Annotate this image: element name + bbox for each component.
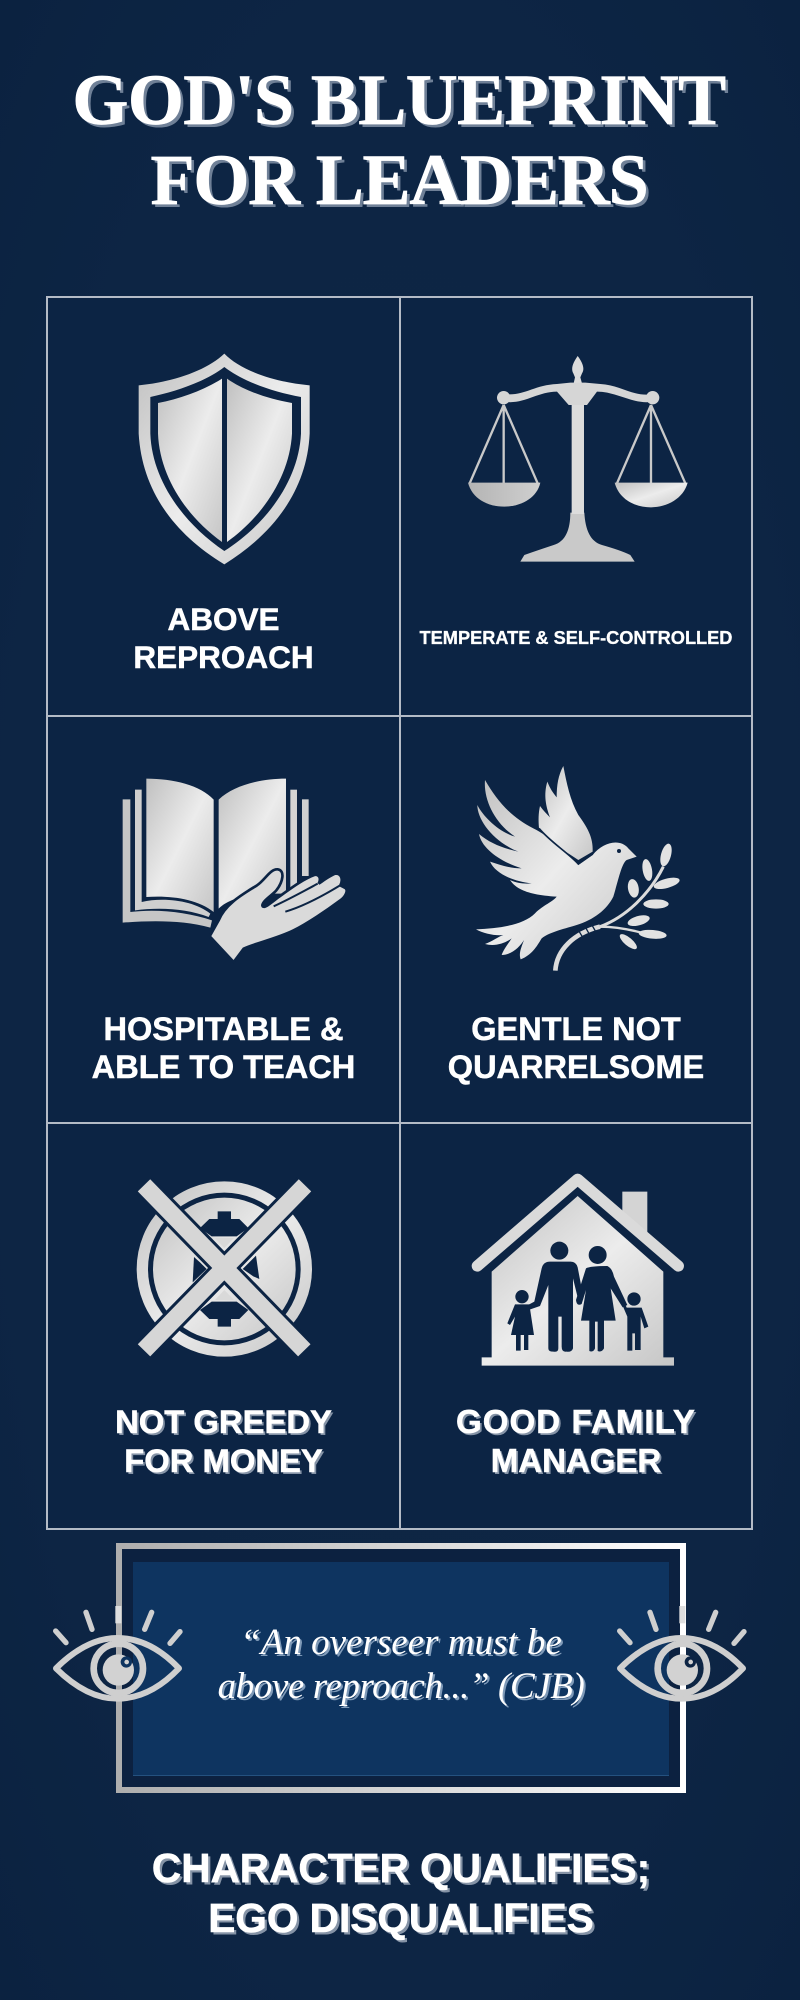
label: gentle not quarrelsome: QUARRELSOME: [448, 1049, 704, 1085]
label: gentle not quarrelsome: [448, 1011, 704, 1085]
icon: right eye: [617, 1606, 747, 1702]
label: not greedy for money: FOR MONEY: [124, 1442, 323, 1479]
icon: crossed-out coin: [136, 1179, 312, 1357]
panel: temperate: [399, 296, 753, 717]
icon: shield: [138, 354, 310, 564]
icon: house with family: [472, 1174, 684, 1366]
label: temperate and self-controlled: TEMPERATE & SELF-CONTROLLED: [420, 628, 732, 648]
footer tagline: [152, 1845, 650, 1942]
panel: quote frame: [116, 1543, 686, 1793]
quote text: “An overseer must be: [240, 1622, 562, 1663]
title: GOD'S BLUEPRINT: [72, 60, 726, 140]
label: gentle not quarrelsome: GENTLE NOT: [471, 1011, 681, 1047]
label: good family manager: GOOD FAMILY: [456, 1403, 696, 1440]
footer tagline: CHARACTER QUALIFIES;: [152, 1845, 650, 1891]
icon: book and hand: [122, 778, 346, 960]
icon: scales: [468, 356, 688, 562]
label: not greedy for money: [115, 1403, 334, 1479]
panel: hospitable: [46, 715, 401, 1124]
label: good family manager: MANAGER: [491, 1442, 661, 1479]
title: [72, 60, 728, 220]
label: hospitable and able to teach: [92, 1010, 355, 1085]
label: above reproach: REPROACH: [133, 639, 314, 675]
label: hospitable and able to teach: ABLE TO TEACH: [92, 1048, 355, 1085]
label: not greedy for money: NOT GREEDY: [115, 1403, 332, 1440]
quote text: [218, 1622, 586, 1708]
panel: gentle: [399, 715, 753, 1124]
label: good family manager: [456, 1403, 696, 1479]
panel: above reproach: [46, 296, 401, 717]
footer tagline: EGO DISQUALIFIES: [208, 1895, 594, 1941]
label: hospitable and able to teach: HOSPITABLE &: [103, 1010, 344, 1047]
panel: not greedy: [46, 1122, 401, 1530]
title: FOR LEADERS: [151, 140, 647, 220]
quote box: [133, 1562, 669, 1776]
label: above reproach: [133, 601, 314, 675]
icon: left eye: [53, 1606, 183, 1702]
icon: dove with olive branch: [476, 766, 680, 971]
label: above reproach: ABOVE: [167, 601, 280, 637]
panel: family manager: [399, 1122, 753, 1530]
quote text: above reproach...” (CJB): [218, 1666, 584, 1707]
